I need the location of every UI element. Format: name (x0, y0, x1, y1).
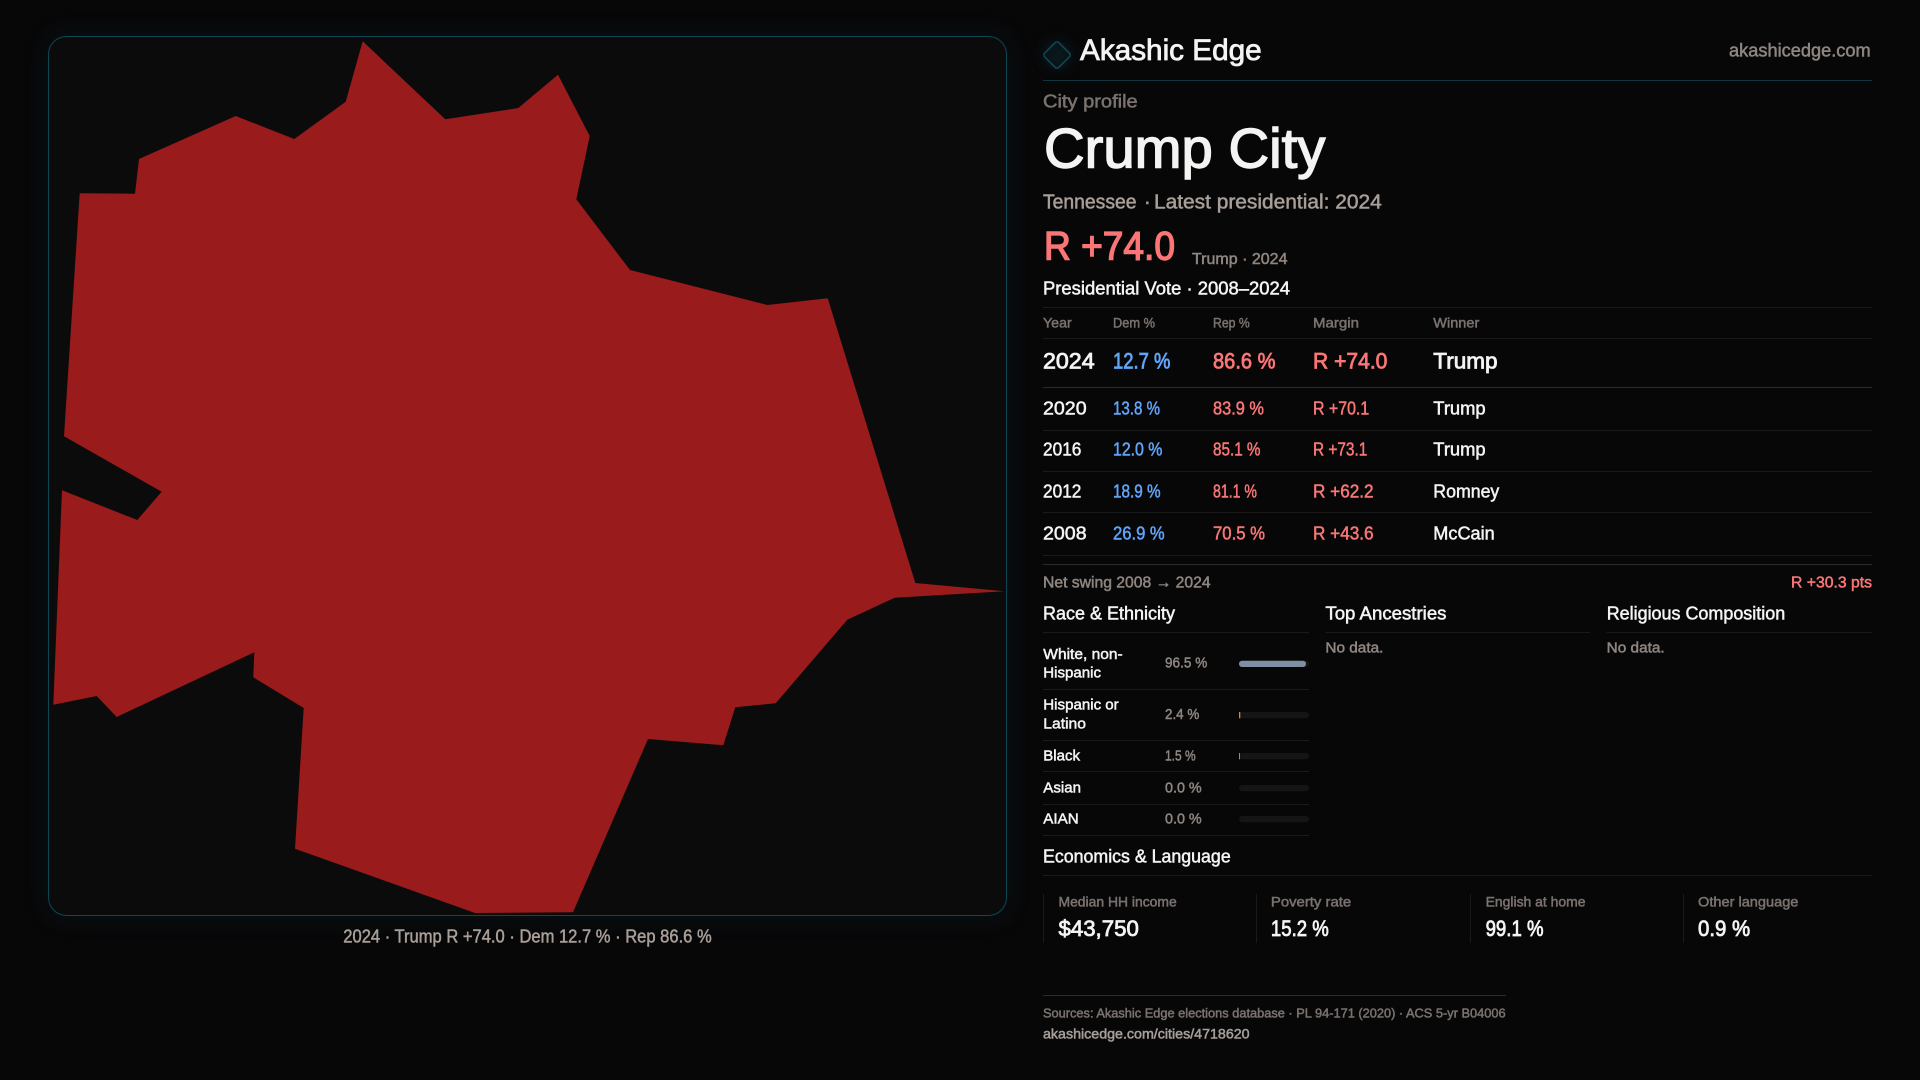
panel: top ancestries (1325, 603, 1590, 657)
row 2016 (1043, 440, 1486, 460)
row 2024: 2024 (1043, 349, 1095, 374)
row 2024: R +74.0 (1313, 349, 1387, 374)
eyebrow: city profile: City profile (1043, 91, 1138, 111)
subtitle: Tennessee (1043, 191, 1136, 213)
title: Crump City (1044, 117, 1325, 180)
panel: religious composition: No data. (1607, 640, 1665, 657)
footer sources: Sources: Akashic Edge elections database · PL 94-171 (2020) · ACS 5-yr B04006 (1043, 1005, 1506, 1020)
stat: other language: Other language (1698, 894, 1799, 910)
panel: economics and language: Economics & Language (1043, 847, 1231, 867)
subtitle: · (1144, 191, 1151, 213)
row: white: White, non- (1043, 646, 1123, 663)
row 2008: 70.5 % (1213, 523, 1265, 543)
table header (1043, 314, 1480, 330)
row: hispanic (1043, 697, 1309, 732)
row 2008: 2008 (1043, 523, 1087, 543)
row: hispanic: 2.4 % (1165, 706, 1199, 723)
row 2020: 2020 (1043, 399, 1087, 419)
net swing: R +30.3 pts (1791, 574, 1872, 591)
row 2008 (1043, 523, 1495, 543)
row 2016: 85.1 % (1213, 440, 1260, 460)
brand name: Akashic Edge (1080, 34, 1262, 67)
icon: diamond logo (1043, 41, 1071, 69)
brand header (1043, 34, 1872, 80)
row 2008: McCain (1433, 523, 1495, 543)
row: asian (1043, 780, 1309, 797)
row 2020: Trump (1433, 399, 1486, 419)
row 2016: 12.0 % (1113, 440, 1162, 460)
row 2020 (1043, 399, 1486, 419)
row: black: Black (1043, 748, 1080, 765)
row 2012: 2012 (1043, 481, 1081, 501)
row: hispanic: Latino (1043, 715, 1086, 732)
row 2012: R +62.2 (1313, 481, 1374, 501)
row 2020: 13.8 % (1113, 399, 1160, 419)
row: asian: 0.0 % (1165, 780, 1202, 797)
table header: Winner (1433, 314, 1480, 330)
panel: top ancestries: No data. (1325, 640, 1383, 657)
row 2020: R +70.1 (1313, 399, 1369, 419)
row 2012: 18.9 % (1113, 481, 1161, 501)
table header: Year (1043, 314, 1072, 330)
city boundary shape (53, 41, 1004, 913)
section heading: presidential vote: Presidential Vote · 2008–2024 (1043, 279, 1290, 299)
net swing (1043, 564, 1872, 591)
footer sources (1043, 996, 1506, 1041)
row: white: 96.5 % (1165, 655, 1207, 672)
table header: Dem % (1113, 314, 1155, 330)
site url: akashicedge.com (1729, 41, 1871, 61)
subtitle: Latest presidential: 2024 (1154, 191, 1382, 213)
row 2016: Trump (1433, 440, 1486, 460)
stat: english at home: 99.1 % (1486, 916, 1544, 941)
row: black: 1.5 % (1165, 748, 1196, 765)
row 2012 (1043, 481, 1499, 501)
panel: religious composition (1607, 603, 1872, 657)
panel: top ancestries: Top Ancestries (1325, 603, 1446, 623)
stat: english at home: English at home (1486, 894, 1586, 910)
table header: Rep % (1213, 314, 1250, 330)
row: hispanic: Hispanic or (1043, 697, 1119, 714)
table header: Margin (1313, 314, 1359, 330)
heading: Race & Ethnicity (1043, 603, 1175, 623)
stat: poverty rate (1256, 894, 1351, 943)
net swing: Net swing 2008 → 2024 (1043, 574, 1211, 591)
row: asian: Asian (1043, 780, 1081, 797)
row: aian: AIAN (1043, 811, 1079, 828)
row 2012: 81.1 % (1213, 481, 1257, 501)
row: white: Hispanic (1043, 665, 1101, 682)
stat: median income (1044, 894, 1177, 943)
map caption: 2024 · Trump R +74.0 · Dem 12.7 % · Rep 86.6 % (343, 926, 712, 946)
row 2024: 12.7 % (1113, 349, 1170, 374)
row: aian: 0.0 % (1165, 811, 1202, 828)
panel: religious composition: Religious Composition (1607, 603, 1785, 623)
row 2008: R +43.6 (1313, 523, 1374, 543)
row 2024: Trump (1433, 349, 1498, 374)
panel: economics and language (1043, 847, 1872, 943)
headline margin: R +74.0 (1044, 224, 1175, 268)
row 2024: 86.6 % (1213, 349, 1276, 374)
stat: poverty rate: Poverty rate (1271, 894, 1351, 910)
stat: median income: $43,750 (1058, 916, 1139, 941)
stat: english at home (1470, 894, 1586, 943)
stat: median income: Median HH income (1058, 894, 1177, 910)
row: white (1043, 646, 1309, 682)
row 2024 (1043, 349, 1498, 374)
row 2020: 83.9 % (1213, 399, 1264, 419)
row 2016: R +73.1 (1313, 440, 1367, 460)
stat: other language: 0.9 % (1698, 916, 1750, 941)
row: black (1043, 748, 1309, 765)
winner note: Trump · 2024 (1192, 251, 1288, 268)
row 2008: 26.9 % (1113, 523, 1165, 543)
stat: other language (1684, 894, 1799, 943)
row 2016: 2016 (1043, 440, 1081, 460)
presidential vote table (1043, 308, 1872, 556)
stat: poverty rate: 15.2 % (1271, 916, 1329, 941)
row 2012: Romney (1433, 481, 1499, 501)
panel: race and ethnicity (1043, 603, 1309, 836)
map panel (48, 36, 1006, 916)
headline margin (1044, 224, 1288, 268)
subtitle (1043, 191, 1382, 213)
page url: akashicedge.com/cities/4718620 (1043, 1025, 1250, 1041)
row: aian (1043, 811, 1309, 828)
